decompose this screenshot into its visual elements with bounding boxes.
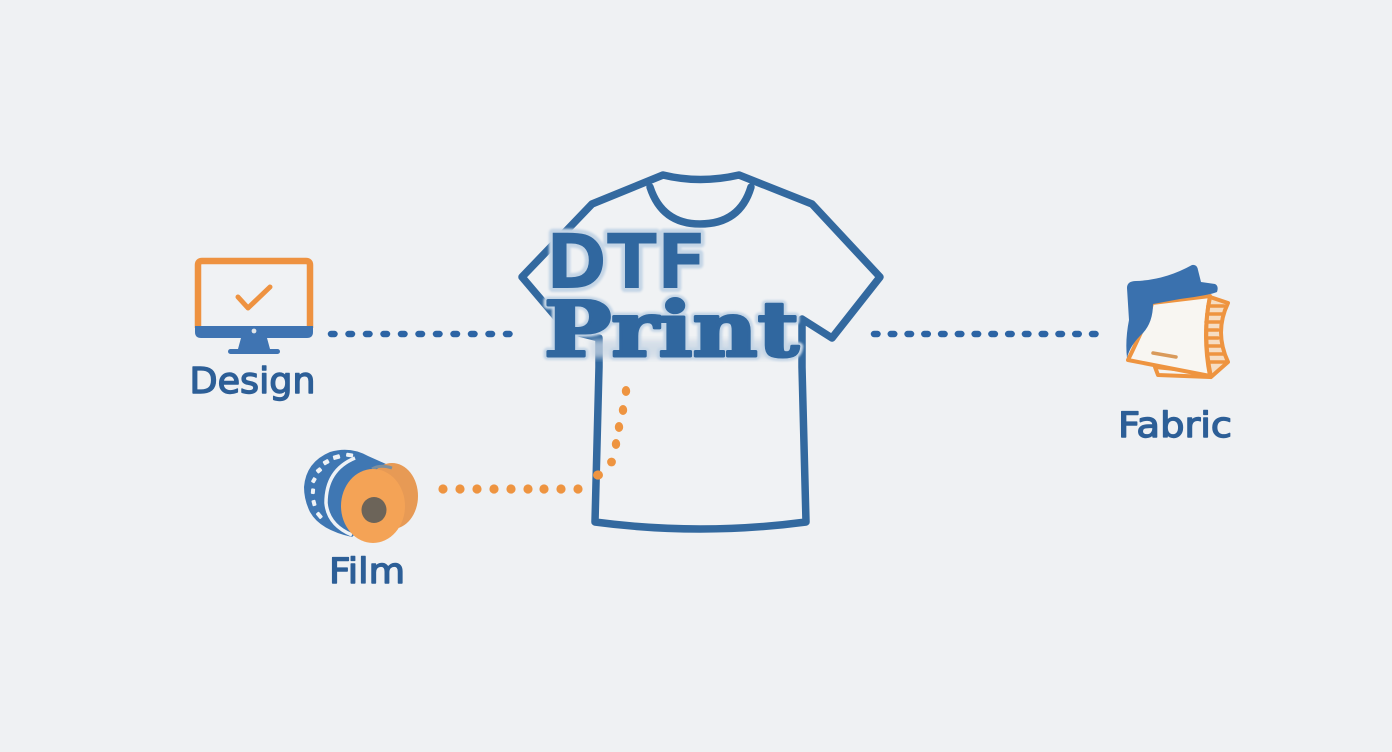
icon: design monitor [195, 261, 313, 354]
title: DTF Print: Print [544, 285, 799, 374]
icon: t-shirt outline [522, 175, 880, 529]
label: Design: Design [190, 361, 316, 402]
connector: design to shirt [331, 331, 512, 337]
title: DTF Print: DTF [546, 217, 707, 306]
connector: film to shirt [438, 386, 630, 494]
connector: shirt to fabric [874, 331, 1098, 337]
title: DTF Print [544, 217, 799, 374]
icon: film roll [304, 450, 418, 543]
icon: fabric swatch [1126, 265, 1228, 377]
label: Fabric: Fabric [1118, 406, 1232, 446]
title: DTF Print: DTF [546, 217, 707, 306]
label: Film: Film [329, 552, 405, 592]
title: DTF Print: Print [544, 285, 799, 374]
